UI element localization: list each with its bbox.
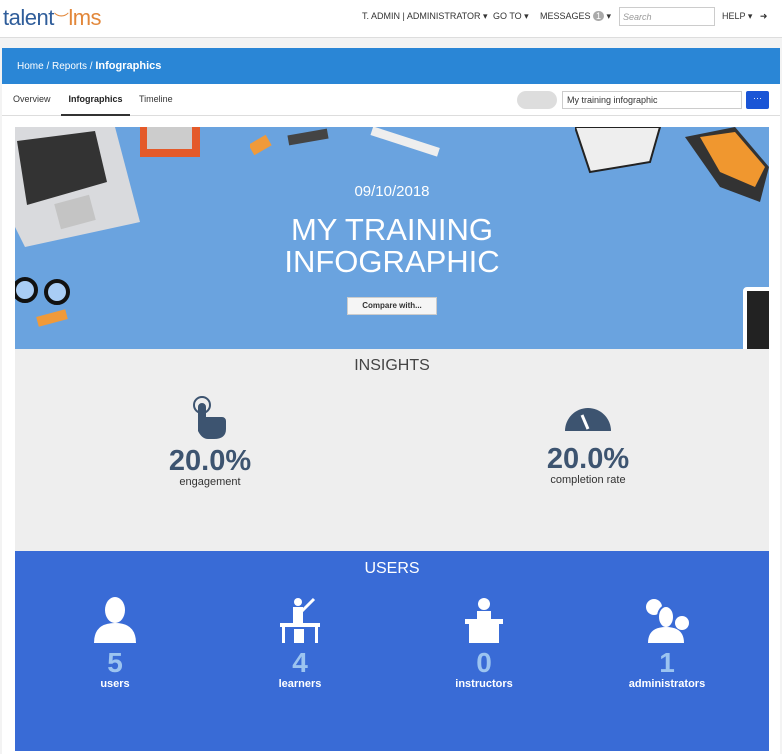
- nav: help: HELP ▾ ➜: [722, 11, 767, 21]
- stat: instructors: instructors: [455, 678, 513, 690]
- toggle: [517, 91, 557, 109]
- icon: gauge: [565, 408, 611, 431]
- stat: learners: learners: [279, 678, 321, 690]
- icon: hand pointer: [193, 396, 226, 439]
- search box: [619, 7, 715, 26]
- top header: [0, 0, 782, 38]
- illustration: right tablet: [743, 287, 782, 357]
- tab infographics active: Infographics: [68, 94, 122, 104]
- title: MY TRAINING: [291, 212, 493, 247]
- menu button: ···: [753, 93, 762, 103]
- dropdown: [562, 91, 742, 109]
- illustration: tablet: [575, 127, 661, 174]
- nav: goto: GO TO ▾: [493, 11, 529, 21]
- icon: learner: [280, 598, 320, 643]
- icon: user: [94, 597, 136, 643]
- stat: administrators: 1: [659, 647, 675, 678]
- breadcrumb bar: Home / Reports / Infographics: [17, 60, 161, 72]
- insights heading: INSIGHTS: [354, 357, 430, 374]
- stat: learners: [279, 598, 321, 690]
- title: INFOGRAPHIC: [284, 244, 500, 279]
- tabs row: [2, 84, 780, 116]
- compare button: [347, 297, 437, 315]
- date: 09/10/2018: [354, 183, 430, 200]
- logo: talent︶lms: [3, 5, 101, 30]
- dropdown: My training infographic: [567, 95, 658, 105]
- stat: users: 5: [107, 647, 123, 678]
- tab overview: Overview: [13, 94, 51, 104]
- stat: engagement: 20.0%: [169, 445, 251, 477]
- search box: Search: [623, 12, 652, 22]
- stat: learners: 4: [292, 647, 308, 678]
- tab timeline: Timeline: [139, 94, 173, 104]
- illustration: orange drive: [140, 127, 200, 157]
- stat: administrators: administrators: [629, 678, 705, 690]
- illustration: glasses: [15, 277, 70, 327]
- stat: engagement: engagement: [179, 476, 241, 488]
- nav: messages: MESSAGES 1 ▾: [540, 11, 611, 21]
- breadcrumb bar: [2, 48, 780, 84]
- icon: admin: [646, 599, 689, 643]
- compare button: Compare with...: [362, 301, 422, 310]
- tab infographics active: [61, 94, 130, 116]
- illustration: notebook: [685, 127, 769, 202]
- icon: instructor: [465, 598, 503, 643]
- stat: completion rate: 20.0%: [547, 443, 629, 475]
- banner: [15, 127, 769, 349]
- stat: users: [94, 597, 136, 690]
- illustration: laptop: [15, 127, 140, 247]
- panel: insights: [15, 349, 769, 551]
- illustration: pens: [250, 127, 440, 157]
- stat: completion rate: completion rate: [550, 474, 626, 486]
- stat: instructors: [455, 598, 513, 690]
- menu button: [746, 91, 769, 109]
- stat: completion rate: [547, 408, 629, 486]
- stat: administrators: [629, 599, 705, 690]
- stat: instructors: 0: [476, 647, 492, 678]
- panel: users: [15, 551, 769, 751]
- users heading: USERS: [364, 560, 420, 577]
- title: [284, 212, 500, 279]
- nav: user: T. ADMIN | ADMINISTRATOR ▾: [362, 11, 488, 21]
- stat: engagement: [169, 396, 251, 488]
- stat: users: users: [100, 678, 130, 690]
